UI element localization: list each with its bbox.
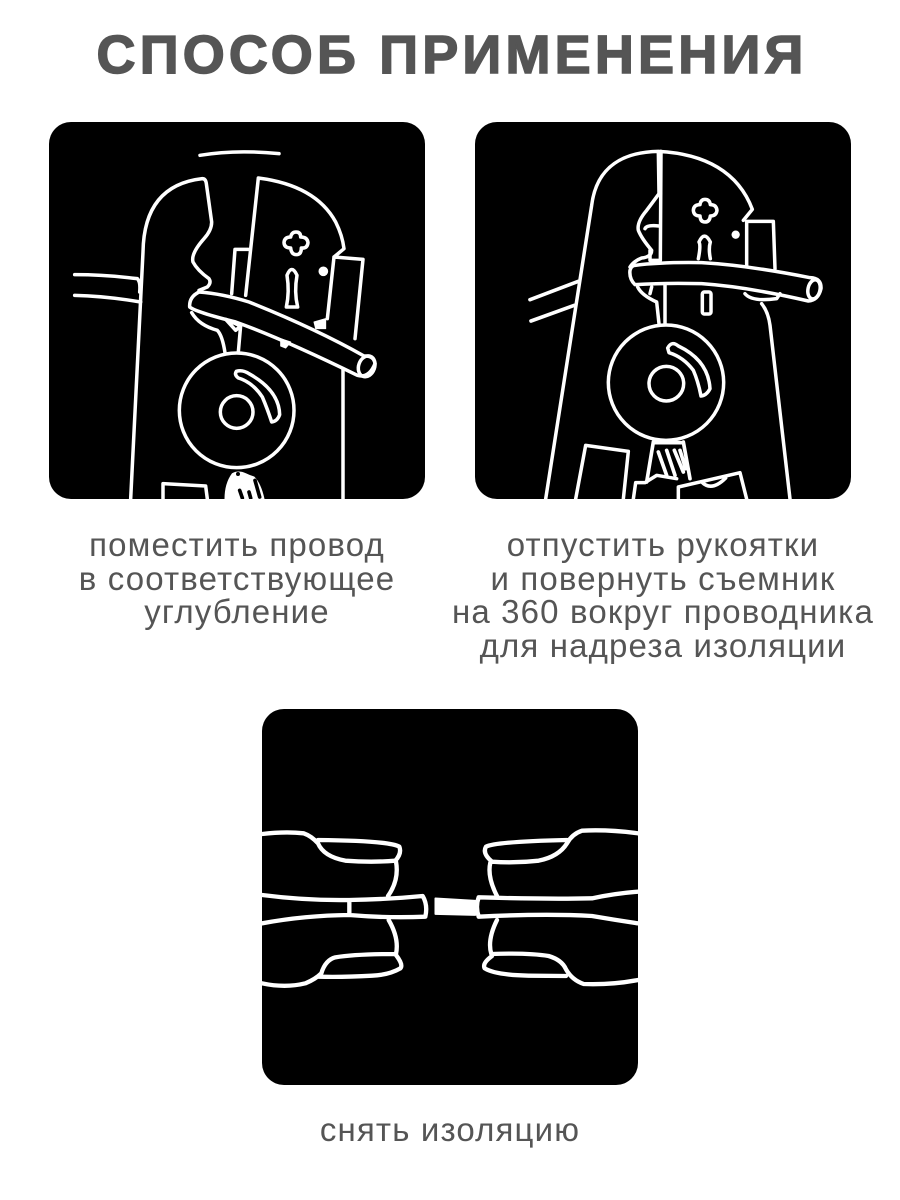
icon: cross notch <box>693 199 717 222</box>
title: СПОСОБ ПРИМЕНЕНИЯ <box>97 25 807 85</box>
icon: wire ends on the left <box>75 275 141 302</box>
icon: lower block <box>163 484 207 499</box>
icon: spring under disc <box>647 442 690 482</box>
icon: left wire with stripped end <box>262 895 426 923</box>
panel: release handles and rotate <box>475 122 851 499</box>
icon: right block <box>747 221 775 269</box>
caption 2 <box>452 526 874 664</box>
icon: spring below disc <box>225 472 264 499</box>
caption 1: в соответствующее <box>79 560 395 597</box>
caption 2: отпустить рукоятки <box>507 526 819 563</box>
icon: lower blocks <box>576 445 747 499</box>
icon: closed tool outline <box>546 151 752 499</box>
icon: slot notch <box>286 270 298 307</box>
icon: small knob <box>732 231 739 238</box>
icon: wire held in jaws <box>190 292 375 376</box>
icon: right hand <box>484 830 638 984</box>
icon: motion arc above open jaws <box>200 152 279 155</box>
caption 2: и повернуть съемник <box>490 560 836 597</box>
icon: left stripper handle <box>131 179 212 499</box>
caption 2: для надреза изоляции <box>480 627 846 664</box>
icon: slot notch <box>698 236 710 259</box>
icon: pivot disc <box>179 353 294 468</box>
caption 3: снять изоляцию <box>320 1111 580 1148</box>
icon: pivot disc <box>608 325 724 440</box>
icon: right stripper jaw <box>232 178 363 499</box>
icon: small knob <box>319 267 328 276</box>
icon: neck under wire <box>638 285 790 499</box>
caption 1 <box>79 526 395 630</box>
caption 2: на 360 вокруг проводника <box>452 593 874 630</box>
icon: left hand <box>262 832 401 986</box>
icon: cross notch <box>284 232 308 255</box>
caption 1: поместить провод <box>89 526 385 563</box>
icon: wire ends on the left <box>530 281 578 321</box>
icon: right wire with cut insulation <box>435 892 638 923</box>
icon: wire across jaws <box>630 263 821 301</box>
caption 1: углубление <box>144 593 330 630</box>
panel: remove insulation <box>262 709 638 1085</box>
icon: lower jaw neck <box>192 313 241 353</box>
panel: place wire into groove <box>49 122 425 499</box>
